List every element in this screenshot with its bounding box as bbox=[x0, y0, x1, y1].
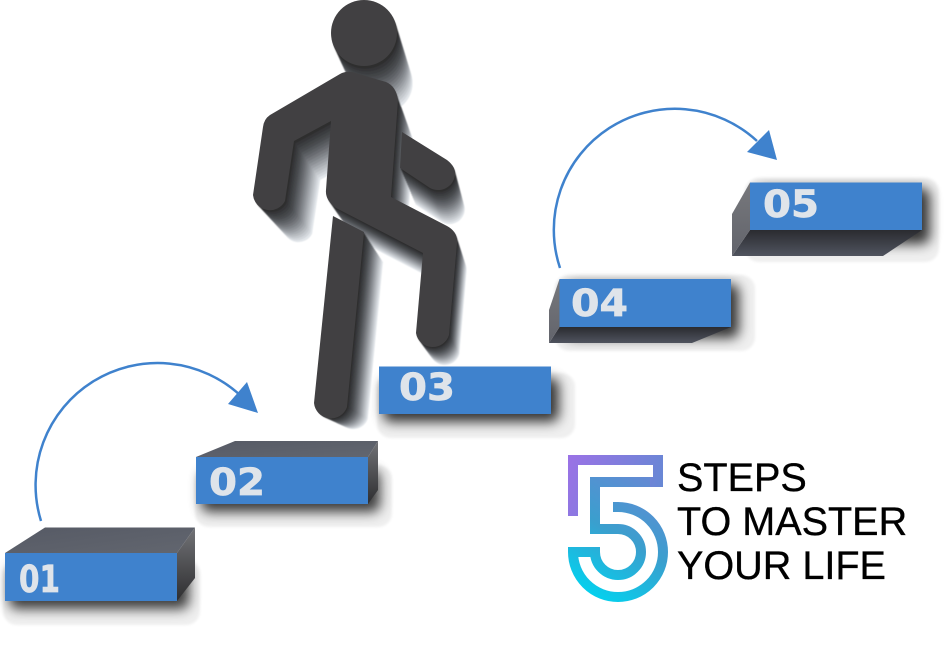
step 03 bbox=[377, 366, 575, 438]
step 05: 05 bbox=[763, 183, 819, 226]
step 01 bbox=[3, 528, 200, 625]
step 02: 02 bbox=[209, 461, 265, 504]
figure shadow bbox=[255, 3, 467, 429]
arrow: step 04 to step 05 bbox=[554, 109, 777, 268]
title: TO MASTER bbox=[677, 500, 907, 544]
arrow: step 01 to step 02 bbox=[36, 363, 258, 521]
logo: numeral 5 bbox=[573, 460, 663, 597]
figure: walking person bbox=[253, 0, 457, 418]
step 05 bbox=[732, 178, 939, 262]
step 03: 03 bbox=[399, 366, 455, 409]
title: YOUR LIFE bbox=[677, 544, 886, 588]
title bbox=[677, 456, 907, 588]
step 02 bbox=[195, 441, 392, 527]
step 04: 04 bbox=[571, 282, 628, 325]
step 04 bbox=[549, 275, 755, 351]
title: STEPS bbox=[677, 456, 807, 500]
step 01: 01 bbox=[19, 558, 60, 601]
